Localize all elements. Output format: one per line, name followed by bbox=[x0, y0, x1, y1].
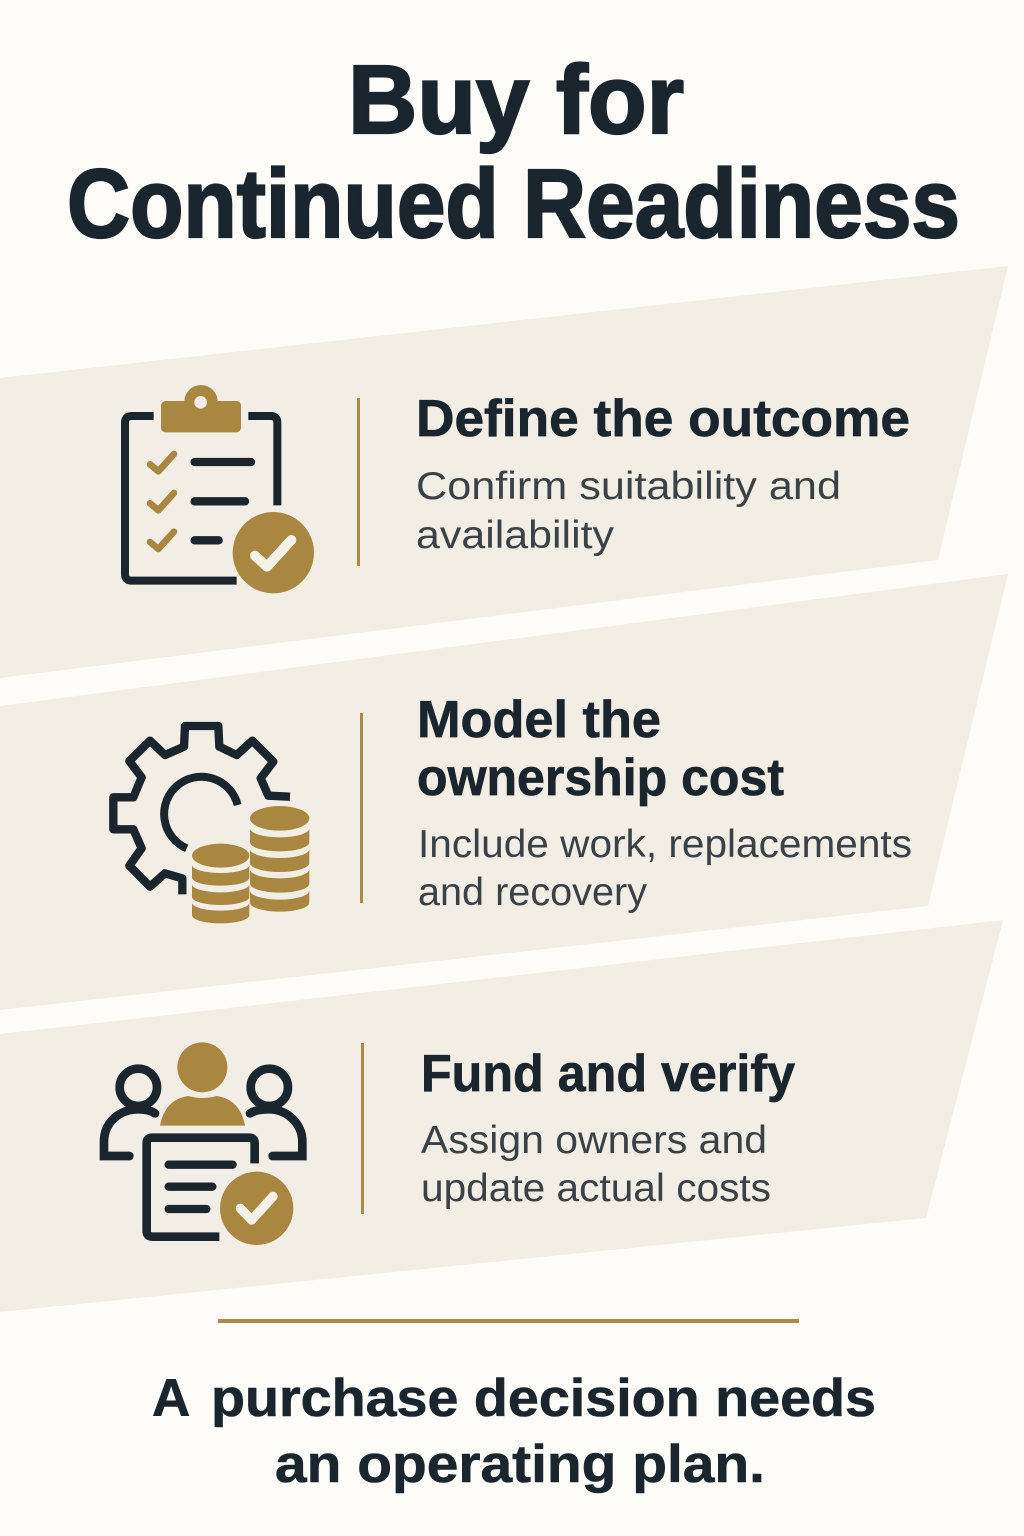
text: define description: Confirm suitability and bbox=[416, 465, 841, 508]
closing statement: purchase decision needs bbox=[211, 1369, 876, 1428]
text: model description bbox=[418, 823, 912, 914]
title bbox=[67, 45, 960, 258]
divider bbox=[360, 713, 363, 903]
text: define description bbox=[416, 465, 841, 557]
closing statement bbox=[152, 1369, 876, 1494]
text: define description: availability bbox=[416, 514, 615, 557]
closing statement: an operating plan. bbox=[275, 1435, 765, 1494]
icon: clipboard checklist bbox=[125, 385, 314, 593]
text: fund description bbox=[421, 1119, 771, 1210]
panel: model the ownership cost bbox=[0, 574, 1008, 1010]
panel: define the outcome bbox=[0, 266, 1008, 678]
heading: define the outcome: Define the outcome bbox=[416, 390, 910, 448]
closing statement: A bbox=[152, 1369, 190, 1428]
text: fund description: Assign owners and bbox=[421, 1119, 767, 1162]
heading: model the ownership cost: ownership cost bbox=[417, 749, 784, 807]
icon: team and verified document bbox=[104, 1042, 302, 1245]
text: fund description: update actual costs bbox=[421, 1167, 771, 1210]
divider: closing rule bbox=[218, 1319, 799, 1323]
text: model description: and recovery bbox=[418, 871, 648, 914]
panel: fund and verify bbox=[0, 920, 1003, 1312]
heading: fund and verify: Fund and verify bbox=[421, 1045, 795, 1103]
heading: model the ownership cost bbox=[417, 691, 784, 807]
divider bbox=[361, 1043, 364, 1214]
text: model description: Include work, replacements bbox=[418, 823, 912, 866]
title: Buy for bbox=[348, 45, 684, 154]
divider bbox=[357, 398, 360, 566]
icon: gear and coins bbox=[113, 726, 309, 923]
heading: model the ownership cost: Model the bbox=[417, 691, 661, 749]
